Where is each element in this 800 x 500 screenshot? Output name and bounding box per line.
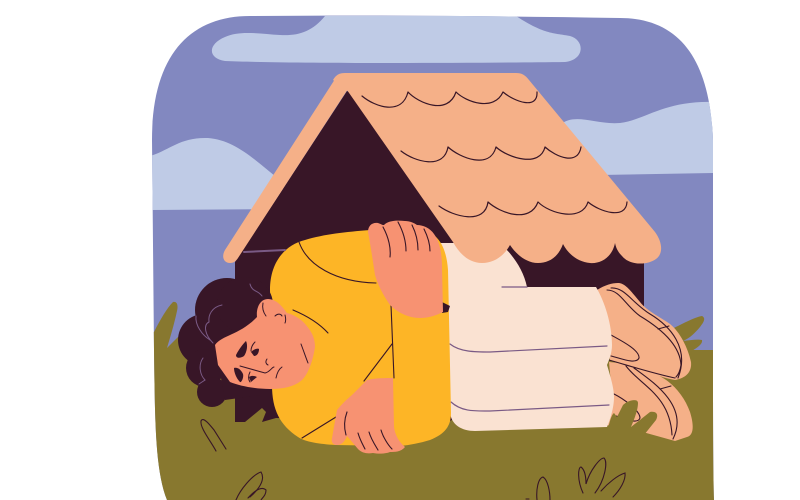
grass blades: right back: [674, 316, 704, 350]
eye: lower: [249, 376, 257, 382]
ground: [150, 302, 715, 500]
hair curls: [196, 284, 262, 384]
hair: [178, 277, 273, 407]
illustration: person curled up in a doghouse: [152, 16, 714, 500]
grass: outlined tufts: [201, 420, 625, 500]
grass: front tufts: [607, 400, 657, 440]
sweater lines: [293, 242, 394, 438]
face: [215, 299, 315, 389]
trousers: [440, 243, 614, 431]
roof slope with scalloped edge: [333, 73, 661, 264]
sweater: [270, 230, 451, 446]
hand: upper: [368, 221, 443, 318]
roof: left eave: [223, 75, 420, 263]
person: torso and head: [178, 221, 451, 454]
roof shingle lines: [362, 92, 627, 217]
eyebrow: lower: [234, 368, 243, 382]
shoe: lower: [606, 362, 693, 441]
hand: lower: [332, 378, 405, 454]
panel: landscape background: [150, 10, 720, 500]
cloud: right: [560, 102, 715, 175]
cloud: top: [212, 16, 581, 63]
face features: [234, 341, 259, 382]
hand: lower finger lines: [345, 412, 392, 450]
face lines: [240, 303, 308, 382]
house wall: [235, 91, 644, 422]
cloud: left: [150, 138, 290, 210]
doghouse: wall and left eave: [223, 75, 644, 422]
legs and shoes: [440, 243, 693, 441]
trouser folds: [450, 287, 609, 411]
eye: upper: [251, 349, 259, 356]
roof ridge mark: [244, 250, 285, 252]
shoe details: [607, 288, 682, 439]
sky: [150, 10, 720, 500]
roof: right slope: [333, 73, 661, 264]
sleeve opening: [442, 302, 450, 313]
shoe: upper: [597, 283, 691, 380]
hand: upper finger lines: [383, 222, 430, 257]
eyebrow: upper: [236, 341, 247, 358]
